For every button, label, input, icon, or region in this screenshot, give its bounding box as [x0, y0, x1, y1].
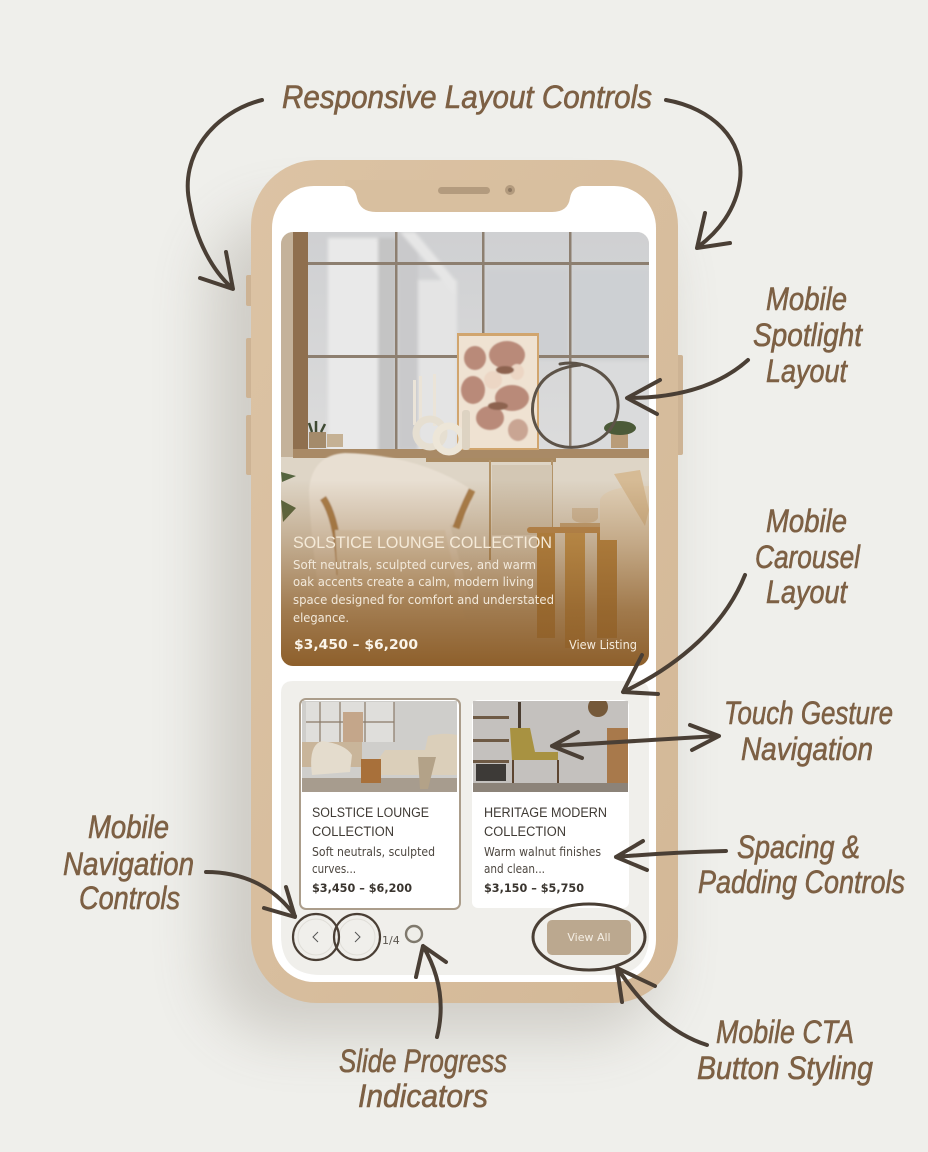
card 1 title: COLLECTION [312, 824, 394, 839]
next button [339, 919, 375, 955]
annotation: mobile navigation controls: Navigation [63, 846, 194, 882]
view all button: View All [567, 931, 611, 944]
sofa [600, 470, 649, 558]
double-headed arrow [552, 725, 719, 758]
card 2 description: and clean... [484, 862, 545, 876]
card 1 price: $3,450 – $6,200 [312, 881, 412, 895]
view all button [547, 920, 631, 955]
arrow to hero [627, 360, 748, 414]
phone mockup [246, 160, 683, 1003]
art print [457, 333, 539, 450]
view listing link: View Listing [569, 638, 637, 652]
hero description: Soft neutrals, sculpted curves, and warm [293, 558, 536, 572]
annotation: mobile spotlight layout: Spotlight [753, 317, 863, 353]
card 2 title [484, 805, 607, 839]
arrow to nav buttons [206, 872, 295, 917]
annotation: mobile spotlight layout [532, 281, 863, 447]
carousel card 2 [472, 697, 629, 908]
carousel panel [281, 681, 649, 975]
annotation: slide progress indicators [339, 946, 507, 1114]
card 2 photo [473, 697, 628, 792]
card 2 title: HERITAGE MODERN [484, 805, 607, 820]
annotation: mobile carousel layout [623, 503, 861, 694]
previous button [298, 919, 334, 955]
hand-drawn ellipse [533, 904, 645, 970]
arrow to card text [616, 841, 726, 870]
notch [345, 180, 582, 212]
phone drop shadow [210, 215, 660, 1035]
hero price: $3,450 – $6,200 [294, 638, 418, 653]
hero description: elegance. [293, 611, 349, 625]
arrow: right curve [666, 100, 741, 248]
armchair [310, 452, 476, 575]
annotation: mobile navigation controls [63, 809, 380, 960]
card 2 description [484, 845, 601, 876]
annotation: spacing and padding controls [616, 829, 905, 900]
annotation: responsive layout controls: Responsive Layout Controls [282, 79, 652, 115]
annotation: responsive layout controls [188, 79, 741, 289]
card 2 description: Warm walnut finishes [484, 845, 601, 859]
arrow to dot [416, 946, 446, 1037]
annotation: touch gesture navigation: Navigation [741, 731, 873, 767]
card 1 title: SOLSTICE LOUNGE [312, 805, 429, 820]
progress dot [406, 926, 422, 942]
annotation: slide progress indicators: Indicators [358, 1078, 488, 1114]
annotation: touch gesture navigation [552, 695, 893, 767]
card 2 title: COLLECTION [484, 824, 566, 839]
hero photo [281, 232, 649, 666]
annotation: touch gesture navigation: Touch Gesture [724, 695, 893, 731]
arrow: left curve [188, 100, 262, 289]
annotation: spacing and padding controls: Spacing & [737, 829, 860, 865]
annotation: mobile cta button styling: Mobile CTA [716, 1014, 854, 1050]
arrow to cta [617, 968, 707, 1045]
annotation: mobile spotlight layout: Layout [766, 353, 848, 389]
hero listing card [281, 232, 649, 666]
card 1 description: Soft neutrals, sculpted [312, 845, 435, 859]
console table [426, 458, 556, 560]
arrow to carousel [623, 575, 745, 694]
gradient overlay [281, 480, 649, 666]
card 2 price: $3,150 – $5,750 [484, 881, 584, 895]
annotation: mobile cta button styling [533, 904, 873, 1086]
annotation: mobile carousel layout: Layout [766, 574, 848, 610]
annotation: mobile cta button styling: Button Styling [697, 1050, 873, 1086]
hero description: oak accents create a calm, modern living [293, 575, 534, 589]
hand-drawn circle [532, 363, 618, 447]
slide counter: 1/4 [382, 934, 400, 947]
side buttons [246, 275, 683, 475]
annotation: mobile carousel layout: Mobile [766, 503, 847, 539]
plant at left [281, 472, 296, 522]
side table and cup [527, 508, 625, 648]
hero description: space designed for comfort and understated [293, 593, 554, 607]
carousel card 1 [300, 699, 460, 909]
plants on sill [309, 421, 636, 448]
annotation: mobile navigation controls: Mobile [88, 809, 169, 845]
hero title: SOLSTICE LOUNGE COLLECTION [293, 534, 552, 552]
card 1 title [312, 805, 429, 839]
card 1 description: curves... [312, 862, 356, 876]
card 1 photo [302, 701, 457, 792]
hand-drawn circles [293, 914, 380, 960]
sculpture and candles [413, 374, 470, 452]
hero description [293, 558, 554, 625]
annotation: slide progress indicators: Slide Progress [339, 1043, 507, 1079]
annotation: mobile navigation controls: Controls [79, 880, 180, 916]
phone body [251, 160, 678, 1003]
speaker and camera [438, 185, 515, 195]
annotation: mobile spotlight layout: Mobile [766, 281, 847, 317]
screen [272, 186, 656, 982]
annotation: mobile carousel layout: Carousel [755, 539, 861, 575]
card 1 description [312, 845, 435, 876]
